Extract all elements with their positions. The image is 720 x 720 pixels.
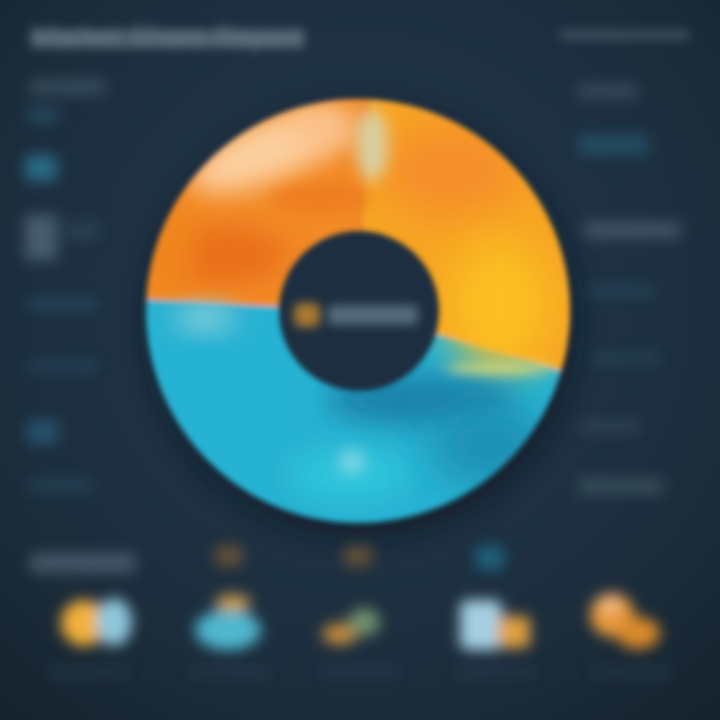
center percentage xyxy=(294,303,320,327)
donut chart xyxy=(142,94,575,528)
header note xyxy=(560,30,690,40)
bottom tick: orange xyxy=(215,546,243,566)
segment: blue xyxy=(142,293,566,528)
segment shading xyxy=(148,90,555,501)
left column labels xyxy=(25,80,105,492)
segment: yellow orange xyxy=(358,95,575,376)
bottom tick: teal xyxy=(476,546,504,570)
icon: orange blob xyxy=(590,593,660,649)
bottom captions xyxy=(50,668,670,676)
icon: orange and blue donut xyxy=(61,598,132,646)
icon: teal pie xyxy=(195,594,261,650)
center label xyxy=(279,231,439,391)
bottom heading xyxy=(30,553,135,573)
center caption xyxy=(328,305,418,325)
icon: amber chart xyxy=(322,608,380,645)
bottom tick: amber xyxy=(344,546,372,566)
segment: orange left xyxy=(142,94,376,312)
title: Market Share Report xyxy=(32,20,303,53)
donut shadow xyxy=(148,108,576,536)
right column labels xyxy=(578,84,680,494)
icon: blue and orange tile xyxy=(460,600,530,650)
